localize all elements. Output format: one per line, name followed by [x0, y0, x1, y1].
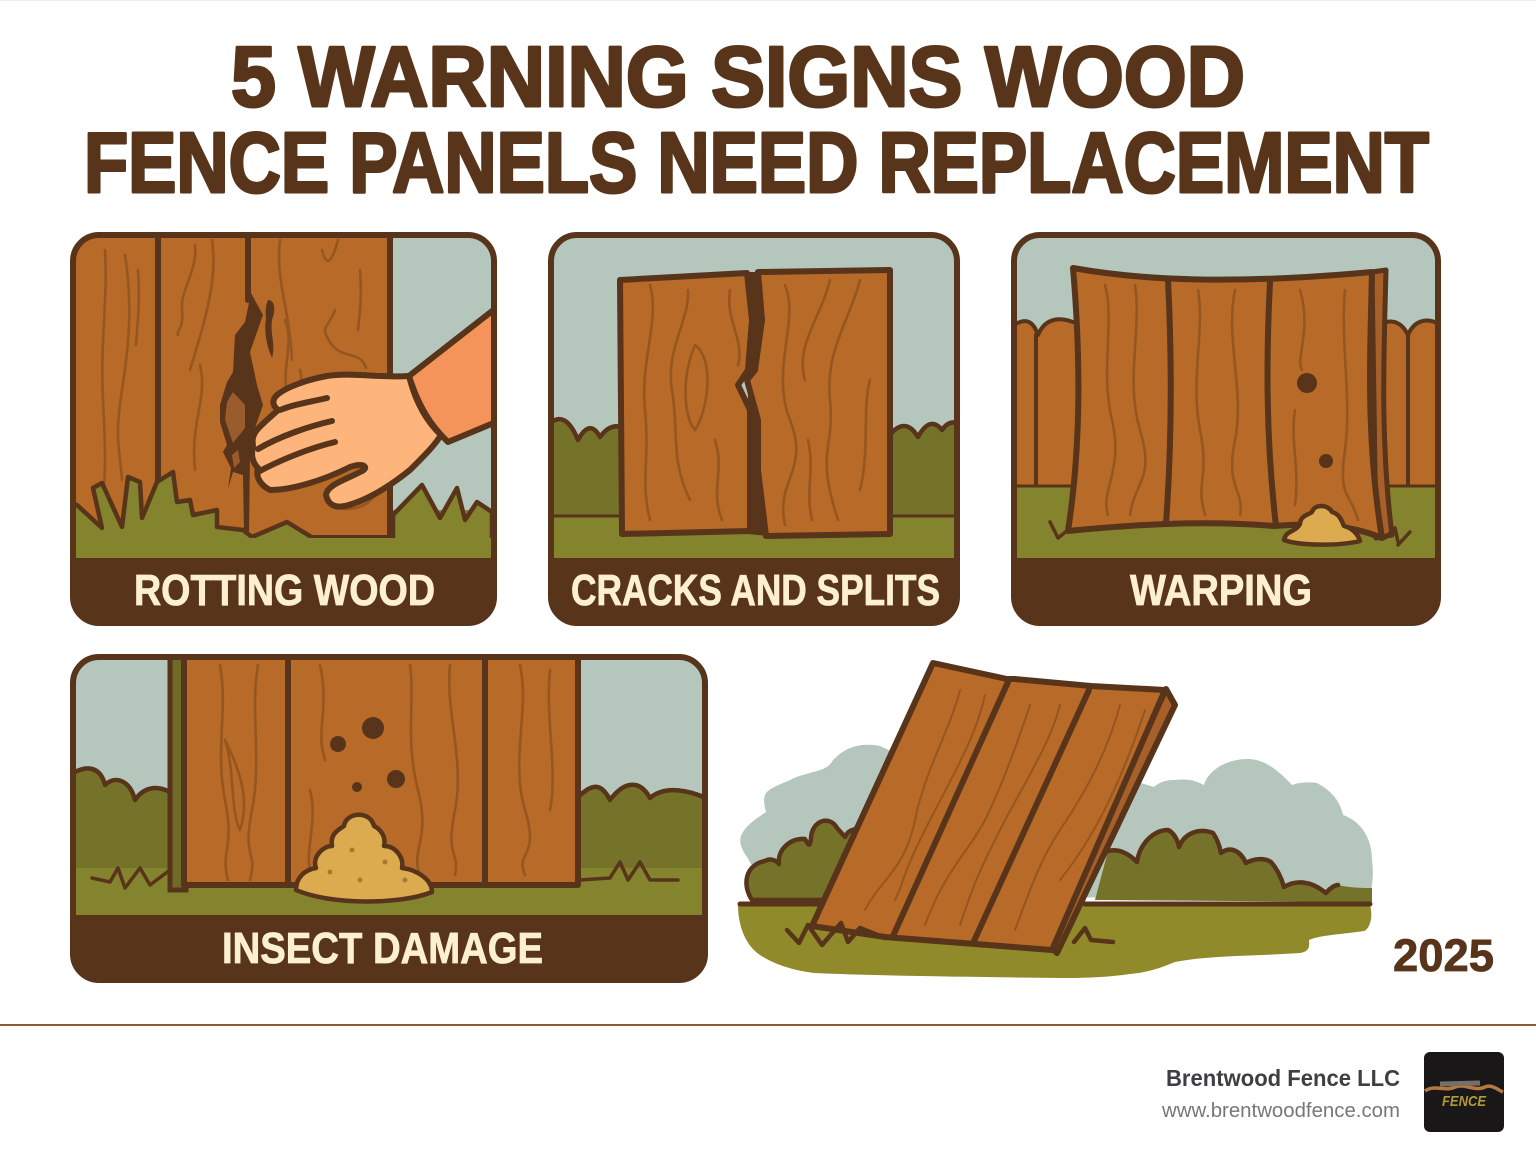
caption: ROTTING WOOD [134, 566, 435, 615]
illustration: leaning fence panel [738, 663, 1373, 978]
insect holes [330, 717, 405, 792]
title: 5 WARNING SIGNS WOOD [231, 30, 1245, 125]
wood planks [170, 650, 578, 890]
frame [73, 235, 494, 623]
panel: rotting wood [70, 232, 497, 623]
bushes [746, 821, 1372, 902]
company website: www.brentwoodfence.com [1161, 1100, 1400, 1122]
panel: insect damage [70, 650, 710, 980]
leaning panel [812, 663, 1175, 953]
grass tufts [1050, 522, 1410, 545]
title [84, 30, 1429, 211]
grass tufts [787, 923, 1113, 945]
caption band [73, 915, 705, 980]
frame [1014, 235, 1438, 623]
grass [76, 470, 491, 538]
caption: CRACKS AND SPLITS [571, 566, 940, 615]
ground [73, 868, 705, 918]
wood planks [70, 232, 390, 538]
footer divider [0, 1024, 1536, 1026]
grass tufts [92, 862, 678, 888]
caption: WARPING [1130, 566, 1312, 615]
hand [252, 375, 441, 507]
ground [1014, 486, 1438, 560]
panel: cracks and splits [548, 235, 962, 623]
ground [738, 904, 1371, 978]
warped panel [1068, 268, 1392, 538]
ground [548, 516, 960, 560]
year: 2025 [1393, 930, 1494, 981]
caption band [551, 558, 957, 623]
crack and rot [220, 293, 274, 533]
logo: FENCE [1442, 1093, 1487, 1110]
grass band [393, 510, 469, 514]
background clouds [740, 745, 1373, 900]
bushes [76, 766, 702, 868]
crack gap [748, 272, 763, 536]
company name: Brentwood Fence LLC [1166, 1065, 1400, 1091]
caption band [1014, 558, 1438, 623]
logo [1424, 1052, 1504, 1132]
panel: warping [1014, 235, 1440, 623]
bushes [548, 419, 962, 518]
arm [409, 308, 496, 442]
sawdust pile [1284, 506, 1360, 545]
background fence [1014, 319, 1440, 490]
frame [551, 235, 957, 623]
right plank [747, 270, 890, 536]
frame [73, 657, 705, 980]
insect holes [1297, 373, 1333, 468]
left plank [620, 273, 752, 534]
sawdust pile [296, 815, 432, 902]
caption band [73, 558, 494, 623]
caption: INSECT DAMAGE [222, 924, 543, 973]
